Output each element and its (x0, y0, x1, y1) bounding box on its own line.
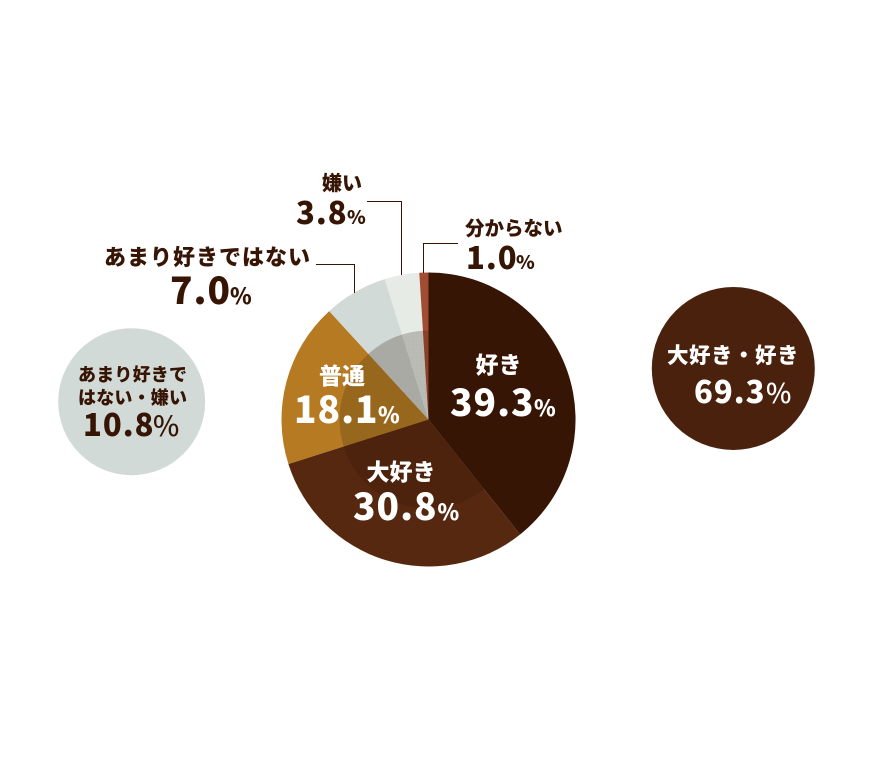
label: 嫌い 3.8%: 3.8 (296, 188, 348, 233)
label: あまり好きではない 7.0% (104, 240, 311, 315)
callout: あまり好きではない・嫌い 10.8%: 10.8 (83, 400, 155, 445)
callout: 大好き・好き 69.3%: 大好き・好き (667, 339, 799, 370)
label: 大好き 30.8%: 大好き (366, 453, 436, 487)
leader line: 嫌い (367, 202, 402, 275)
label: 普通 18.1% (294, 357, 400, 434)
label: 普通 18.1%: 普通 (319, 357, 365, 391)
callout: 大好き・好き 69.3%: 69.3 (694, 367, 766, 412)
label: 好き 39.3%: 39.3 (450, 373, 535, 427)
slice: 大好き 30.8% (288, 420, 520, 567)
label: 嫌い 3.8% (296, 167, 366, 233)
label: 普通 18.1%: 18.1 (294, 380, 379, 434)
label: 分からない 1.0%: % (516, 248, 535, 275)
label: 分からない 1.0%: 分からない (465, 212, 563, 241)
label: 分からない 1.0%: 1.0 (466, 233, 518, 278)
label: 大好き 30.8%: % (438, 495, 460, 527)
leader line: 分からない (424, 244, 458, 273)
slice: 普通 18.1% (281, 311, 428, 464)
inner ring shading (340, 330, 484, 509)
label: 好き 39.3%: 好き (476, 346, 522, 380)
label: あまり好きではない 7.0%: あまり好きではない (104, 240, 311, 272)
label: 嫌い 3.8%: 嫌い (322, 167, 362, 196)
label: あまり好きではない 7.0%: 7.0 (170, 261, 231, 315)
slice: 分からない 1.0% (419, 272, 428, 420)
label: 嫌い 3.8%: % (347, 203, 366, 230)
callout: あまり好きではない・嫌い 10.8%: はない・嫌い (78, 384, 187, 410)
slice: 好き 39.3% (428, 272, 576, 534)
label: 普通 18.1%: % (378, 398, 400, 430)
callout: あまり好きではない・嫌い 10.8%: あまり好きで (78, 361, 187, 387)
label: 大好き 30.8% (353, 453, 460, 531)
label: 好き 39.3%: % (534, 391, 556, 423)
label: 分からない 1.0% (465, 212, 563, 278)
label: 大好き 30.8%: 30.8 (353, 477, 438, 531)
slice: あまり好きではない 7.0% (329, 279, 428, 420)
callout: 大好き・好き 69.3%: % (766, 372, 791, 411)
pie chart (281, 272, 576, 567)
callout: あまり好きではない・嫌い 10.8% (58, 328, 205, 475)
callout: あまり好きではない・嫌い 10.8%: % (153, 405, 179, 445)
leader line: あまり好きではない (316, 264, 354, 293)
label: 好き 39.3% (450, 346, 556, 427)
callout: 大好き・好き 69.3% (652, 287, 815, 450)
label: あまり好きではない 7.0%: % (230, 279, 252, 311)
slice: 嫌い 3.8% (385, 273, 428, 420)
